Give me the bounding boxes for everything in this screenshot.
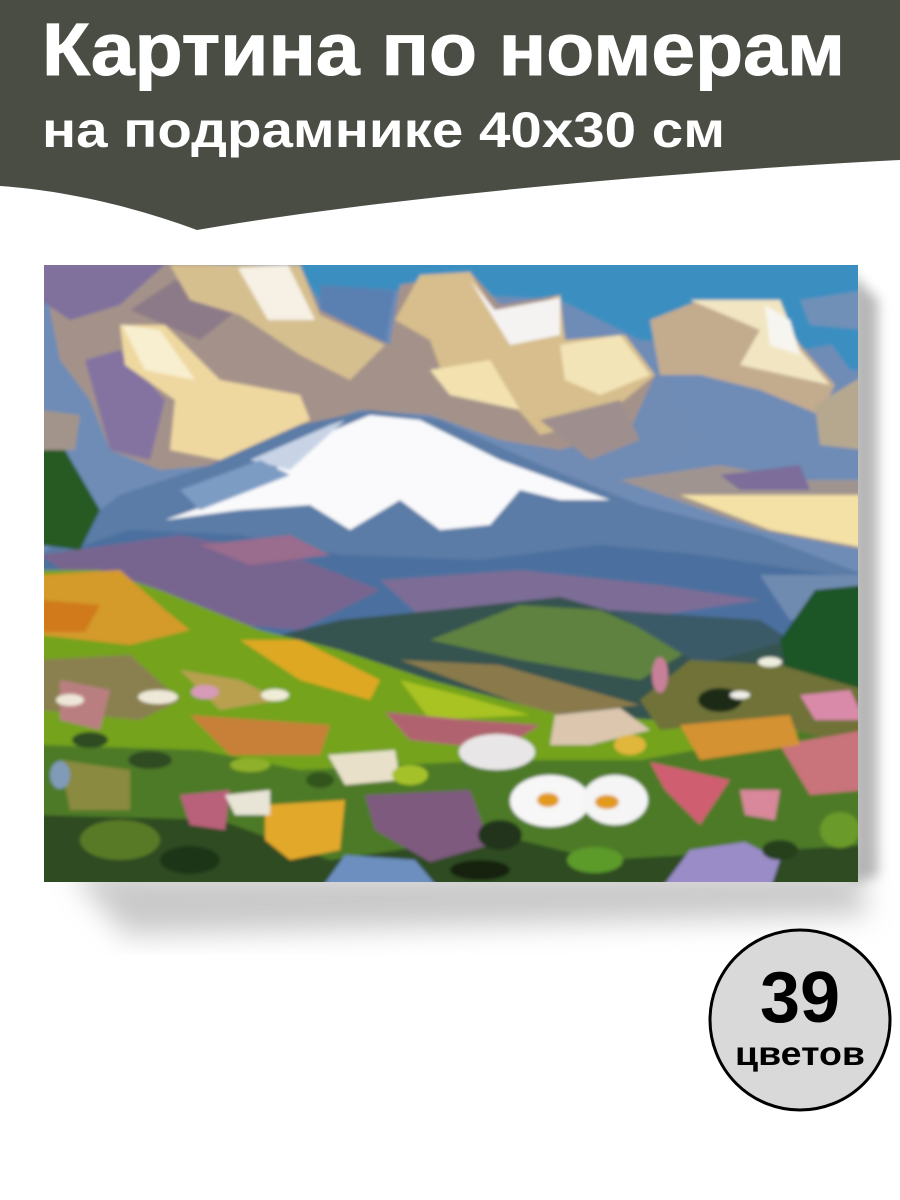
- canvas shadow: [70, 272, 878, 935]
- badge number: 39: [760, 958, 840, 1038]
- tree right: [780, 585, 865, 690]
- badge: 39 colours: [710, 930, 890, 1110]
- badge label: цветов: [735, 1035, 865, 1072]
- daisies: [459, 734, 648, 827]
- banner: [0, 0, 900, 230]
- distant hills: [280, 596, 788, 722]
- foreground flowers: [40, 660, 865, 890]
- title: Картина по номерам: [42, 8, 845, 91]
- sky: [40, 260, 865, 590]
- mountain: [40, 410, 865, 650]
- tree left: [40, 450, 100, 550]
- subtitle: на подрамнике 40х30 см: [42, 102, 725, 158]
- meadow: [44, 568, 801, 773]
- meadow brush dabs: [50, 657, 860, 880]
- clouds: [40, 260, 865, 550]
- painting: mountain meadow: [40, 260, 865, 890]
